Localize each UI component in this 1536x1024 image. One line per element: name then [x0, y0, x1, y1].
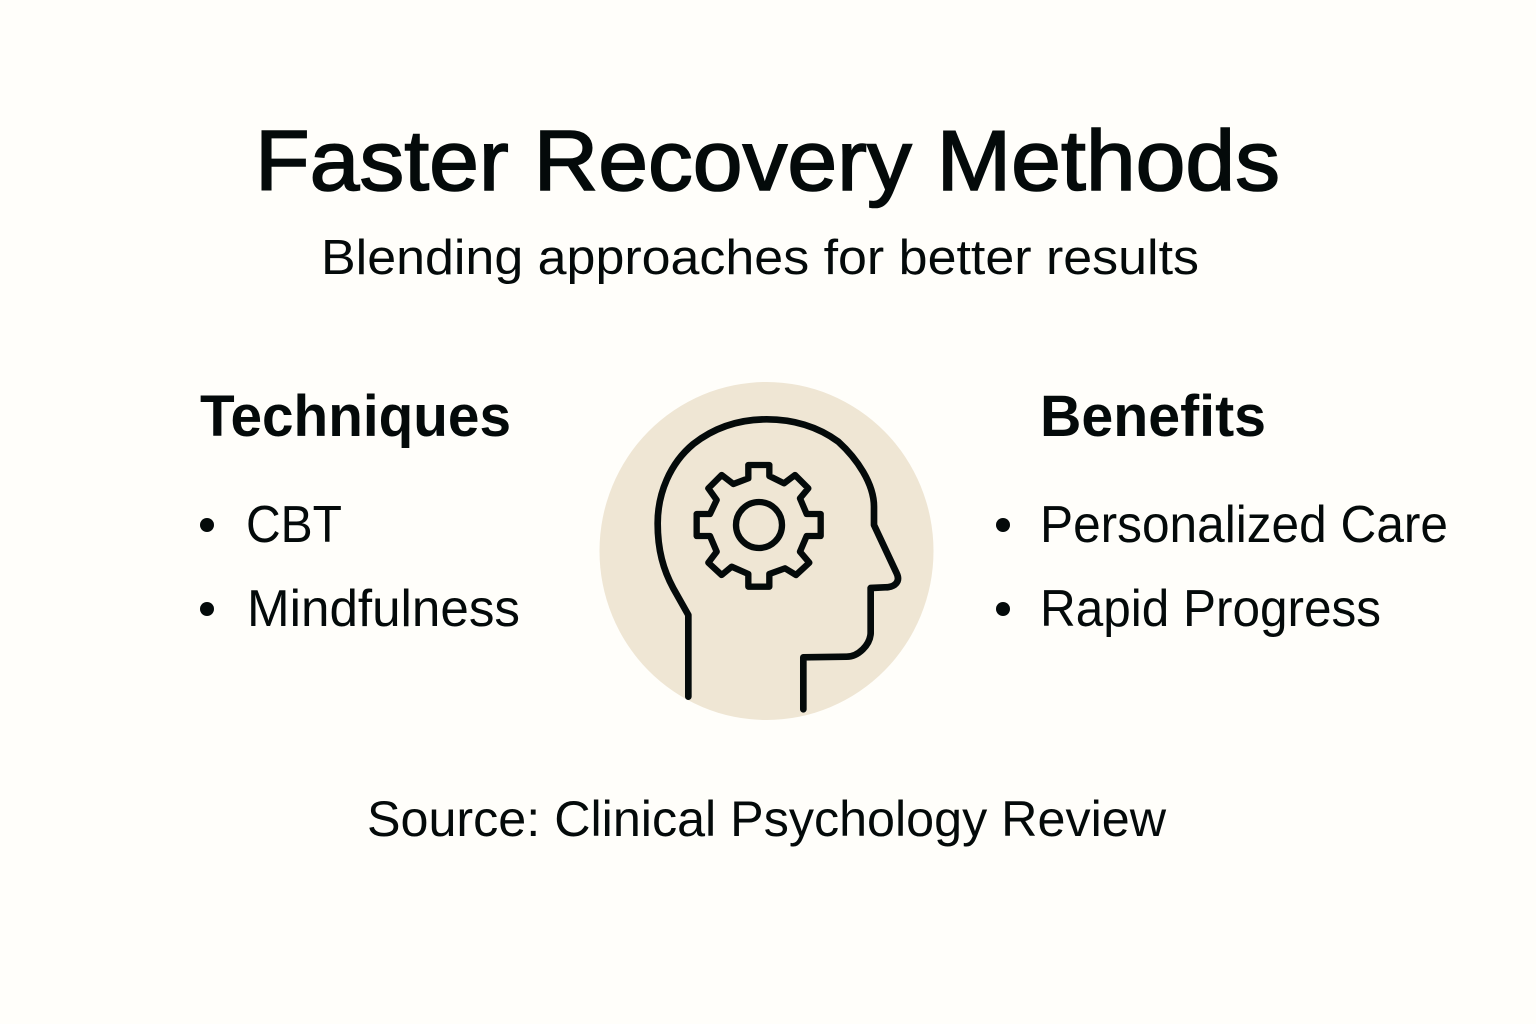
heading: techniques: Techniques [200, 384, 511, 449]
list item: Rapid Progress: Rapid Progress [1040, 580, 1381, 638]
icon: head with gear [600, 382, 934, 720]
source line: Source: Clinical Psychology Review [367, 791, 1167, 847]
list item: CBT [200, 496, 342, 554]
subtitle: Blending approaches for better results [321, 231, 1199, 285]
icon: head outline [658, 419, 898, 709]
list item: Personalized Care: Personalized Care [1040, 496, 1448, 554]
list item: CBT: CBT [246, 496, 342, 554]
heading: benefits: Benefits [1040, 384, 1266, 449]
icon background circle [600, 382, 934, 720]
panel: techniques [200, 384, 520, 638]
icon: gear [697, 465, 821, 587]
title: Faster Recovery Methods [255, 114, 1280, 209]
panel: benefits [996, 384, 1448, 638]
list item: Mindfulness: Mindfulness [247, 580, 520, 638]
